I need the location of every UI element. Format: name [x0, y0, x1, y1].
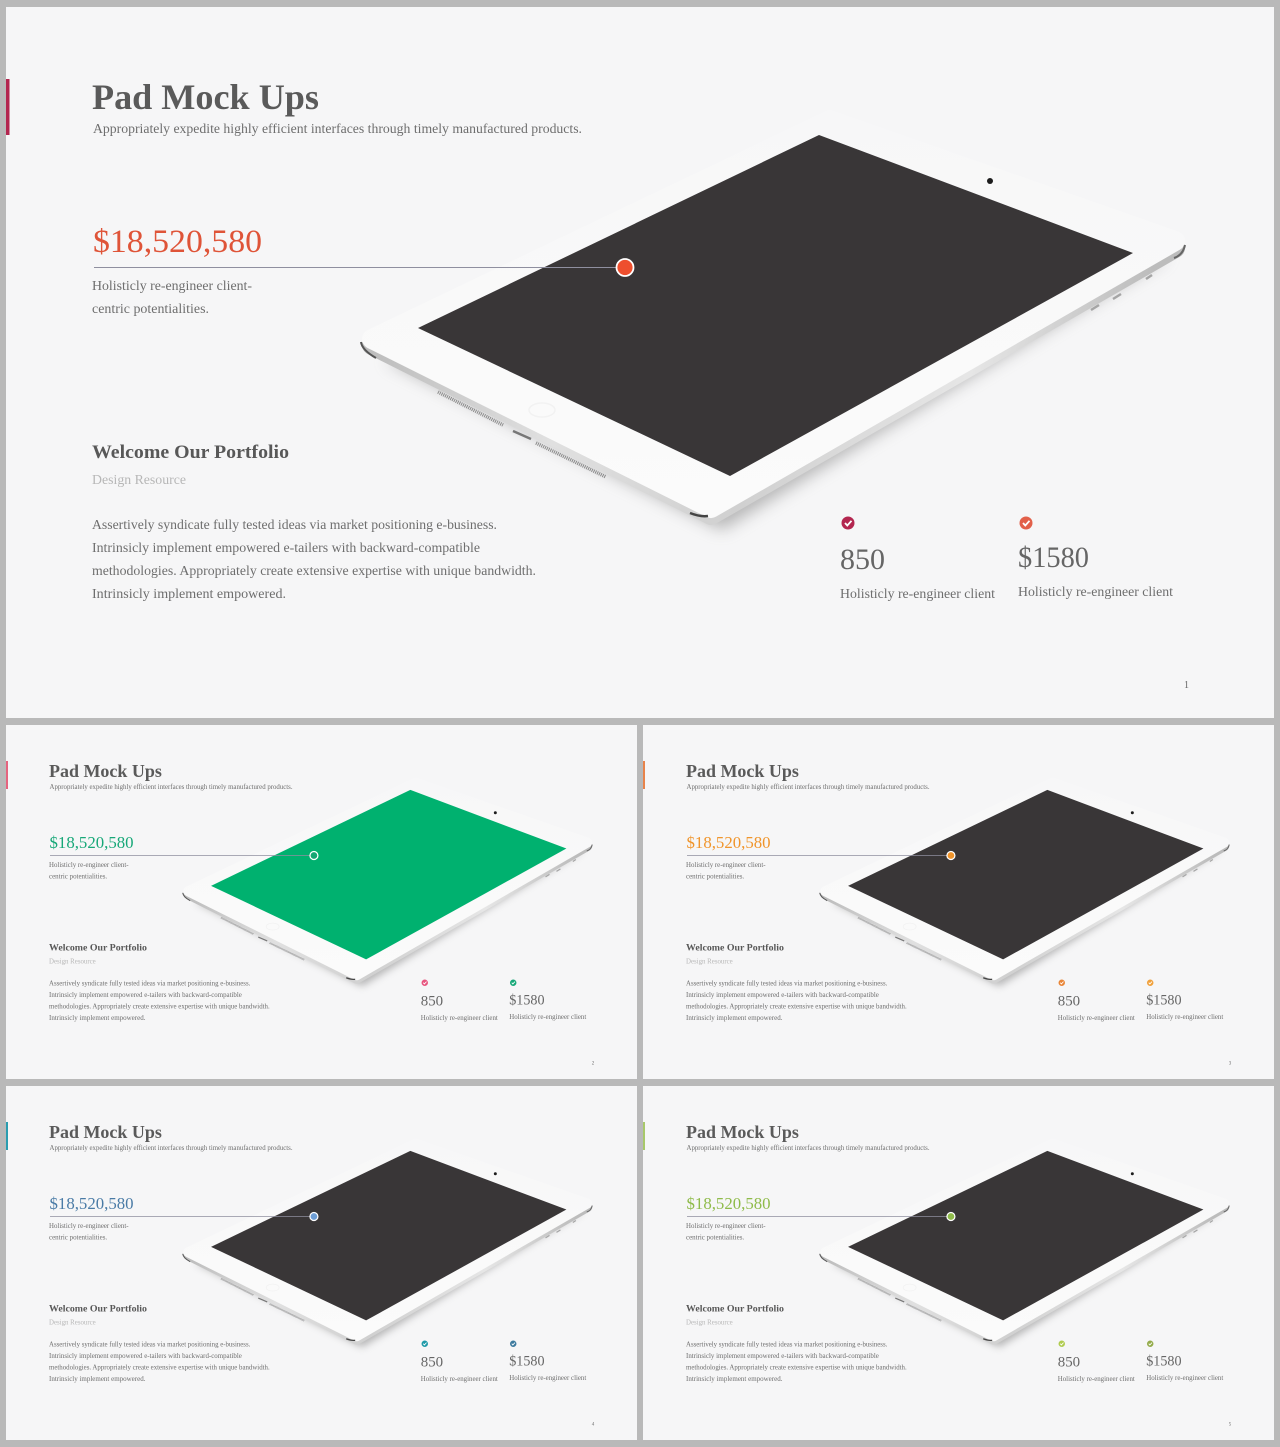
value description: [49, 1222, 129, 1241]
section subheading: Design Resource: [92, 473, 186, 488]
body paragraph: Intrinsicly implement empowered.: [686, 1375, 783, 1383]
title: Pad Mock Ups: [686, 1122, 799, 1142]
section heading: Welcome Our Portfolio: [92, 442, 289, 463]
accent bar: [6, 79, 10, 135]
body paragraph: [49, 980, 270, 1022]
body paragraph: methodologies. Appropriately create extensive expertise with unique bandwidth.: [686, 1003, 907, 1011]
slide background: green: [6, 725, 637, 1079]
accent bar: [643, 1122, 645, 1150]
stat: 850: 850: [421, 1355, 443, 1371]
headline value: $18,520,580: [687, 833, 771, 852]
subtitle: Appropriately expedite highly efficient interfaces through timely manufactured products.: [50, 783, 293, 791]
body paragraph: Assertively syndicate fully tested ideas via market positioning e-business.: [49, 1341, 251, 1349]
section heading: Welcome Our Portfolio: [686, 943, 784, 953]
subtitle: Appropriately expedite highly efficient interfaces through timely manufactured products.: [687, 1144, 930, 1152]
tablet mockup: [183, 782, 592, 986]
stat: $1580: $1580: [509, 993, 545, 1009]
body paragraph: Intrinsicly implement empowered e-tailers with backward-compatible: [686, 991, 879, 999]
stat: 850: 850: [1058, 994, 1080, 1010]
body paragraph: Intrinsicly implement empowered.: [49, 1375, 146, 1383]
stat: 850: Holisticly re-engineer client: [840, 587, 995, 602]
callout line and marker: [687, 852, 955, 859]
subtitle: Appropriately expedite highly efficient interfaces through timely manufactured products.: [93, 122, 582, 137]
body paragraph: Assertively syndicate fully tested ideas via market positioning e-business.: [49, 980, 251, 988]
tablet mockup: [820, 782, 1229, 986]
stat: 850: Holisticly re-engineer client: [1058, 1375, 1135, 1383]
stat: 850: Holisticly re-engineer client: [421, 1014, 498, 1022]
value description: [92, 279, 252, 317]
subtitle: Appropriately expedite highly efficient interfaces through timely manufactured products.: [50, 1144, 293, 1152]
page number: 3: [1229, 1062, 1232, 1067]
slide background: main: [6, 7, 1274, 718]
body paragraph: methodologies. Appropriately create extensive expertise with unique bandwidth.: [49, 1003, 270, 1011]
body paragraph: Intrinsicly implement empowered e-tailers with backward-compatible: [49, 1352, 242, 1360]
stat: 850: [840, 516, 995, 602]
section subheading: Design Resource: [686, 1318, 733, 1326]
callout line and marker: [94, 259, 634, 276]
value description: centric potentialities.: [49, 872, 107, 880]
value description: Holisticly re-engineer client-: [686, 861, 766, 869]
title: Pad Mock Ups: [686, 761, 799, 781]
stat: 850: 850: [421, 994, 443, 1010]
body paragraph: methodologies. Appropriately create extensive expertise with unique bandwidth.: [92, 564, 536, 579]
tablet mockup: [183, 1143, 592, 1347]
accent bar: [6, 1122, 8, 1150]
section subheading: Design Resource: [49, 957, 96, 965]
stat: $1580: Holisticly re-engineer client: [509, 1374, 586, 1382]
stat: 850: [421, 980, 498, 1022]
panel: green slide: [6, 761, 595, 1067]
stat: $1580: [509, 980, 586, 1021]
page number: 1: [1184, 680, 1189, 691]
headline value: $18,520,580: [50, 1194, 134, 1213]
stat: 850: Holisticly re-engineer client: [421, 1375, 498, 1383]
body paragraph: [686, 980, 907, 1022]
body paragraph: Intrinsicly implement empowered e-tailers with backward-compatible: [686, 1352, 879, 1360]
page number: 5: [1229, 1423, 1232, 1428]
stat: $1580: $1580: [1018, 541, 1089, 574]
callout line and marker: [50, 852, 318, 859]
body paragraph: [49, 1341, 270, 1383]
stat: $1580: Holisticly re-engineer client: [509, 1013, 586, 1021]
value description: Holisticly re-engineer client-: [686, 1222, 766, 1230]
stat: 850: [1058, 980, 1135, 1022]
page number: 4: [592, 1423, 595, 1428]
section heading: Welcome Our Portfolio: [686, 1304, 784, 1314]
body paragraph: methodologies. Appropriately create extensive expertise with unique bandwidth.: [49, 1364, 270, 1372]
stat: 850: Holisticly re-engineer client: [1058, 1014, 1135, 1022]
stat: 850: [421, 1341, 498, 1383]
body paragraph: [92, 518, 536, 602]
value description: Holisticly re-engineer client-: [49, 1222, 129, 1230]
section subheading: Design Resource: [49, 1318, 96, 1326]
stat: 850: 850: [840, 543, 885, 576]
section subheading: Design Resource: [686, 957, 733, 965]
subtitle: Appropriately expedite highly efficient interfaces through timely manufactured products.: [687, 783, 930, 791]
section heading: Welcome Our Portfolio: [49, 943, 147, 953]
stat: $1580: $1580: [509, 1354, 545, 1370]
body paragraph: Assertively syndicate fully tested ideas via market positioning e-business.: [92, 518, 497, 533]
body paragraph: Intrinsicly implement empowered e-tailers with backward-compatible: [92, 541, 480, 556]
panel: lime slide: [643, 1122, 1232, 1428]
slide background: lime: [643, 1086, 1274, 1440]
stat: $1580: $1580: [1146, 1354, 1182, 1370]
tablet mockup: [820, 1143, 1229, 1347]
stat: $1580: [509, 1341, 586, 1382]
body paragraph: Intrinsicly implement empowered.: [92, 587, 286, 602]
stat: $1580: $1580: [1146, 993, 1182, 1009]
slide background: blue: [6, 1086, 637, 1440]
value description: centric potentialities.: [686, 872, 744, 880]
value description: centric potentialities.: [92, 302, 209, 317]
headline value: $18,520,580: [687, 1194, 771, 1213]
title: Pad Mock Ups: [92, 77, 319, 117]
value description: [686, 1222, 766, 1241]
page number: 2: [592, 1062, 595, 1067]
stat: $1580: Holisticly re-engineer client: [1018, 585, 1173, 600]
body paragraph: Intrinsicly implement empowered e-tailers with backward-compatible: [49, 991, 242, 999]
section heading: Welcome Our Portfolio: [49, 1304, 147, 1314]
stat: 850: 850: [1058, 1355, 1080, 1371]
value description: Holisticly re-engineer client-: [92, 279, 252, 294]
panel: main slide: [6, 77, 1189, 691]
accent bar: [6, 761, 8, 789]
value description: [49, 861, 129, 880]
callout line and marker: [50, 1213, 318, 1220]
headline value: $18,520,580: [93, 224, 262, 260]
panel: orange slide: [643, 761, 1232, 1067]
value description: [686, 861, 766, 880]
title: Pad Mock Ups: [49, 1122, 162, 1142]
body paragraph: Assertively syndicate fully tested ideas via market positioning e-business.: [686, 1341, 888, 1349]
stat: $1580: Holisticly re-engineer client: [1146, 1374, 1223, 1382]
body paragraph: Assertively syndicate fully tested ideas via market positioning e-business.: [686, 980, 888, 988]
body paragraph: methodologies. Appropriately create extensive expertise with unique bandwidth.: [686, 1364, 907, 1372]
stat: 850: [1058, 1341, 1135, 1383]
value description: centric potentialities.: [686, 1233, 744, 1241]
stat: $1580: [1146, 980, 1223, 1021]
body paragraph: Intrinsicly implement empowered.: [49, 1014, 146, 1022]
body paragraph: Intrinsicly implement empowered.: [686, 1014, 783, 1022]
accent bar: [643, 761, 645, 789]
panel: blue slide: [6, 1122, 595, 1428]
slide background: orange: [643, 725, 1274, 1079]
stat: $1580: [1146, 1341, 1223, 1382]
tablet mockup: [361, 120, 1185, 530]
body paragraph: [686, 1341, 907, 1383]
stat: $1580: [1018, 516, 1173, 600]
value description: centric potentialities.: [49, 1233, 107, 1241]
stat: $1580: Holisticly re-engineer client: [1146, 1013, 1223, 1021]
title: Pad Mock Ups: [49, 761, 162, 781]
headline value: $18,520,580: [50, 833, 134, 852]
value description: Holisticly re-engineer client-: [49, 861, 129, 869]
callout line and marker: [687, 1213, 955, 1220]
